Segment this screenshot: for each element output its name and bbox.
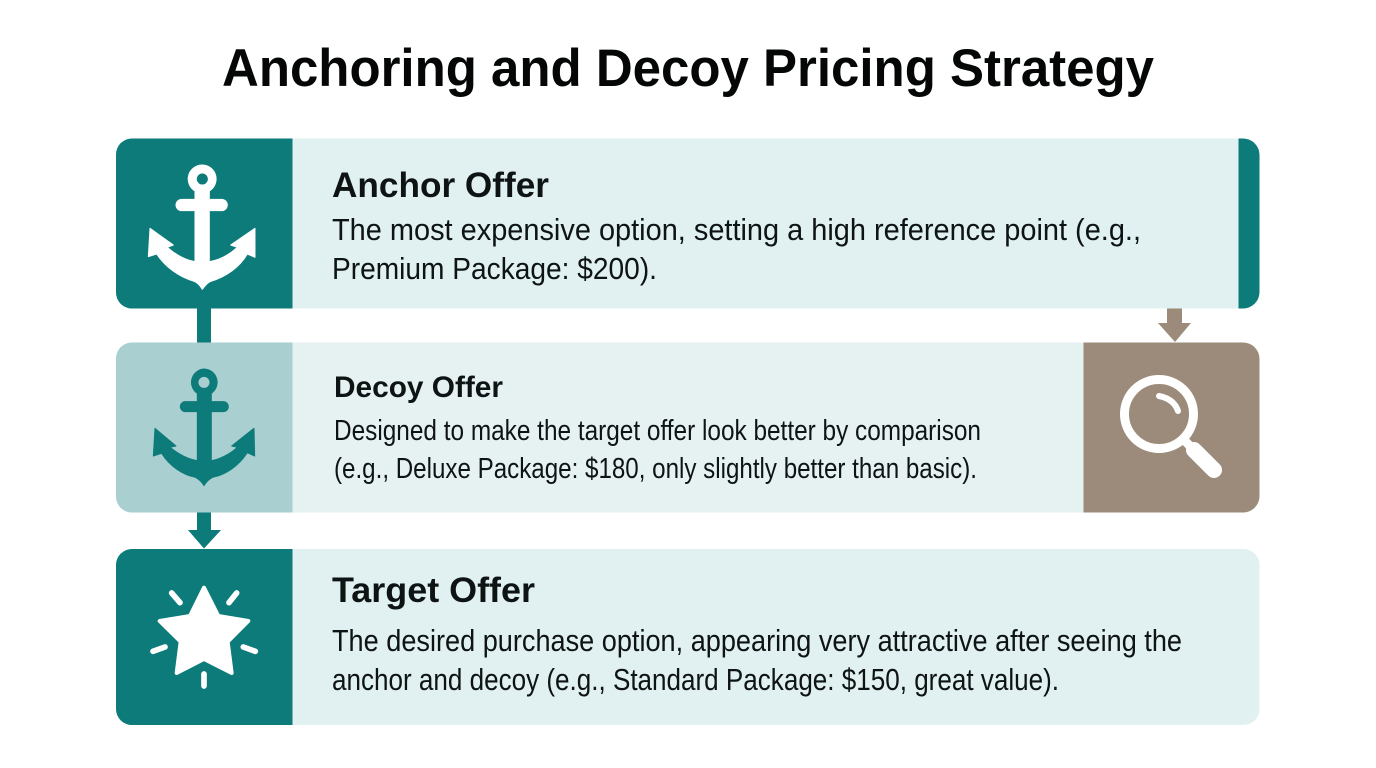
- panel: anchor offer: [116, 138, 1260, 308]
- icon: magnifying glass: [1124, 380, 1214, 470]
- description: [334, 415, 981, 485]
- description: anchor and decoy (e.g., Standard Package: $150, great value).: [332, 662, 1059, 697]
- icon: anchor: [148, 165, 255, 289]
- description: Premium Package: $200).: [332, 251, 657, 286]
- icon block: [116, 549, 292, 725]
- panel: target offer: [116, 549, 1260, 725]
- panel: decoy offer: [116, 342, 1260, 512]
- icon block: [116, 138, 292, 308]
- magnifier block: [1084, 342, 1260, 512]
- connector: anchor to decoy: [197, 307, 211, 344]
- description: (e.g., Deluxe Package: $180, only slightly better than basic).: [334, 453, 977, 485]
- icon: faded anchor: [153, 369, 255, 486]
- description: Designed to make the target offer look better by comparison: [334, 415, 981, 447]
- panel background: [116, 549, 1260, 725]
- description: The desired purchase option, appearing very attractive after seeing the: [332, 623, 1182, 658]
- heading: Decoy Offer: [334, 371, 503, 404]
- panel background: [116, 342, 1260, 512]
- heading: Anchor Offer: [332, 166, 549, 205]
- icon block: [116, 342, 292, 512]
- description: [332, 212, 1141, 286]
- heading: Target Offer: [332, 571, 535, 610]
- right accent bar: [1238, 138, 1260, 308]
- arrow: anchor to decoy magnifier: [1158, 307, 1191, 342]
- description: [332, 623, 1182, 697]
- description: The most expensive option, setting a high reference point (e.g.,: [332, 212, 1141, 247]
- panel background: [116, 138, 1260, 308]
- arrow: decoy to target: [188, 511, 221, 548]
- icon: star with rays: [153, 588, 255, 686]
- title: Anchoring and Decoy Pricing Strategy: [222, 39, 1155, 98]
